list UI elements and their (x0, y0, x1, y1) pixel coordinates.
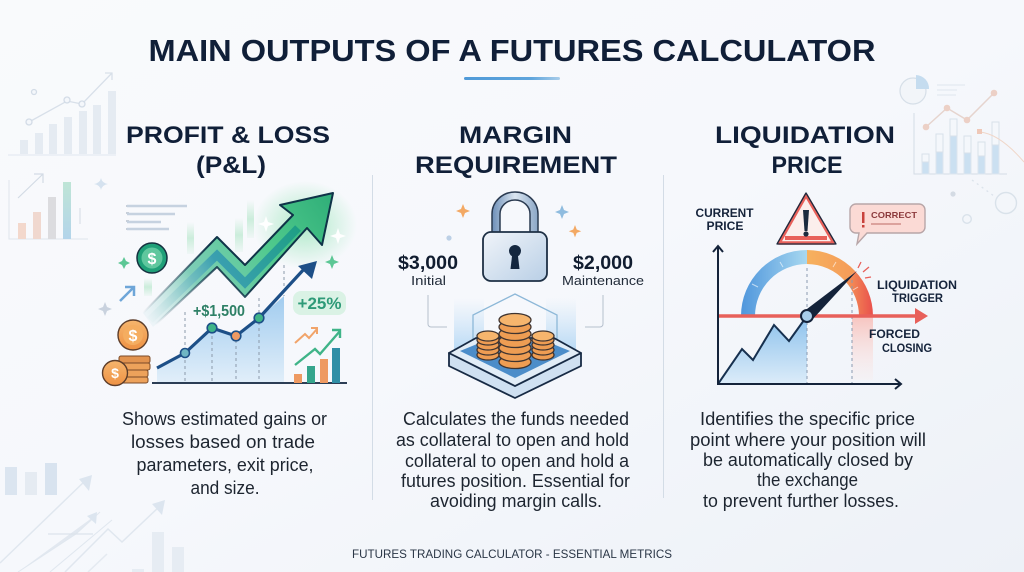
P&L illustration (98, 181, 357, 386)
title underline (464, 77, 560, 80)
label: current price: CURRENT (696, 206, 754, 220)
axes (713, 246, 901, 389)
description: margin requirement: avoiding margin calls. (430, 491, 602, 511)
description: liquidation price: to prevent further losses. (703, 491, 899, 511)
amount: maintenance margin: Maintenance (562, 273, 644, 288)
brackets (428, 295, 603, 327)
forced closing zone (852, 316, 873, 380)
description: liquidation price: point where your position will (690, 430, 926, 450)
description: liquidation price (690, 409, 926, 511)
label: +25% (293, 291, 346, 315)
icon: green growth arrow (143, 193, 333, 327)
heading: liquidation price (715, 122, 895, 179)
amount: maintenance margin (562, 253, 644, 288)
heading: margin requirement (415, 122, 617, 179)
icon: coin stack (102, 320, 150, 386)
divider (662, 175, 664, 498)
liquidation line arrow (719, 308, 928, 324)
description: margin requirement (396, 409, 630, 511)
label: liquidation trigger: TRIGGER (892, 291, 943, 305)
description: profit and loss: parameters, exit price, (136, 455, 314, 475)
label: current price: PRICE (706, 219, 744, 233)
panel: liquidation price (690, 122, 957, 511)
panel: margin requirement (396, 122, 644, 511)
amount: initial margin (398, 253, 458, 288)
label: liquidation trigger (877, 278, 957, 305)
gauge (741, 250, 873, 316)
icon: coin stack: $ (129, 328, 138, 345)
mini bar chart (294, 328, 340, 383)
label: forced closing: FORCED (869, 327, 920, 341)
description: liquidation price: Identifies the specific price (700, 409, 915, 429)
sparkles (118, 255, 339, 269)
decorative chart: mid left (9, 174, 129, 239)
heading: margin requirement: MARGIN (459, 122, 572, 149)
amount: maintenance margin: $2,000 (573, 253, 633, 274)
icon: warning triangle (777, 193, 836, 244)
panel: profit and loss (98, 122, 357, 498)
icon: dollar coin green (137, 243, 167, 273)
decorative chart: top right (900, 75, 1024, 223)
coin stacks (477, 314, 554, 368)
label: liquidation trigger: LIQUIDATION (877, 278, 957, 292)
gauge needle (801, 262, 871, 322)
description: profit and loss: Shows estimated gains or (122, 409, 327, 429)
divider (372, 175, 374, 500)
description: margin requirement: collateral to open and hold a (405, 451, 630, 471)
description: liquidation price: be automatically closed by (703, 450, 913, 470)
label: forced closing: CLOSING (882, 341, 932, 355)
icon: small blue arrow (120, 287, 134, 301)
sparkles (446, 204, 581, 241)
heading: liquidation price: PRICE (772, 152, 842, 179)
description: margin requirement: Calculates the funds needed (403, 409, 629, 429)
icon: coin stack: $ (111, 365, 119, 381)
label: current price (696, 206, 754, 233)
description: margin requirement: as collateral to open and hold (396, 430, 629, 450)
illustration: coins on platform (449, 294, 581, 398)
title: MAIN OUTPUTS OF A FUTURES CALCULATOR (148, 33, 876, 68)
heading: liquidation price: LIQUIDATION (715, 122, 895, 149)
callout: correct: CORRECT (871, 210, 918, 220)
description: profit and loss: losses based on trade (131, 432, 315, 452)
amount: initial margin: $3,000 (398, 253, 458, 274)
heading: profit and loss: (P&L) (196, 152, 266, 179)
icon: padlock (483, 192, 547, 281)
label: forced closing (869, 327, 932, 355)
footer: FUTURES TRADING CALCULATOR - ESSENTIAL METRICS (352, 549, 672, 561)
description: profit and loss: and size. (190, 478, 260, 498)
heading: margin requirement: REQUIREMENT (415, 152, 617, 179)
heading: profit and loss (126, 122, 330, 179)
label: +$1,500: +$1,500 (193, 303, 245, 320)
decorative chart: top left (8, 73, 116, 155)
amount: initial margin: Initial (411, 273, 446, 288)
heading: profit and loss: PROFIT & LOSS (126, 122, 330, 149)
description: profit and loss (122, 409, 327, 498)
icon: dollar coin green: $ (148, 251, 157, 268)
area chart with line (152, 261, 347, 383)
decorative chart: bottom left (0, 463, 184, 572)
label: +25%: +25% (298, 294, 342, 313)
line chart area (718, 268, 852, 384)
description: margin requirement: futures position. Essential for (401, 471, 630, 491)
description: liquidation price: the exchange (757, 470, 858, 490)
callout: correct (850, 204, 925, 244)
